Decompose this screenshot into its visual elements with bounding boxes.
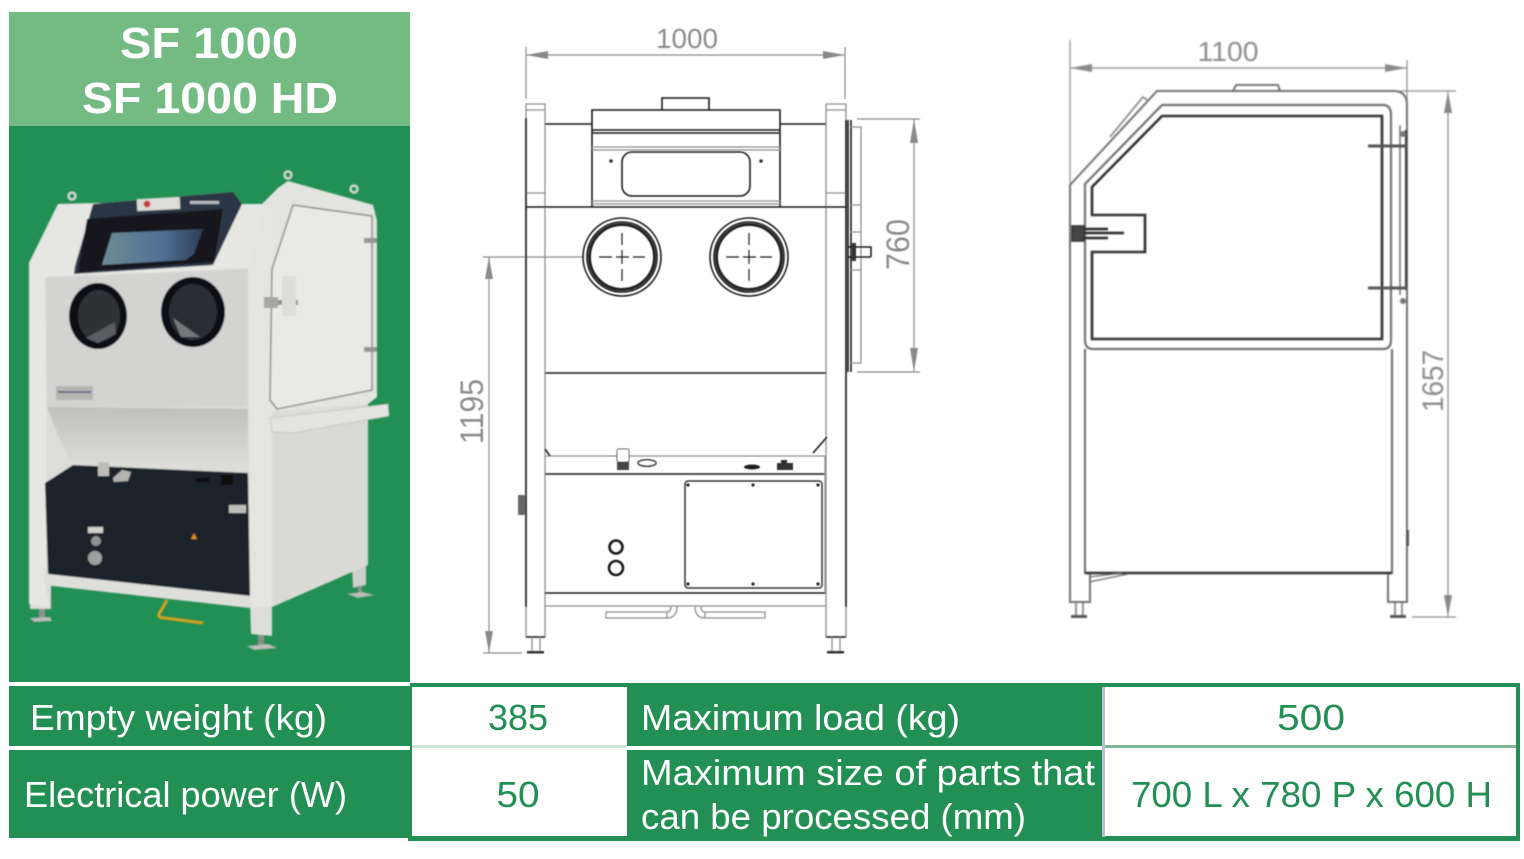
dimension: total height 1657: 1657 bbox=[1417, 350, 1450, 412]
specification table bbox=[9, 683, 1520, 841]
access panel bbox=[685, 481, 822, 588]
dimension: total height 1657 bbox=[1400, 91, 1456, 617]
value: maximum part size: 700 L x 780 P x 600 H bbox=[1131, 774, 1492, 815]
viewing glass bbox=[102, 229, 203, 265]
lifting eyelets bbox=[68, 172, 358, 200]
side panel of cabinet bbox=[272, 405, 368, 607]
yellow foot pedal bbox=[159, 600, 203, 623]
lower panel bbox=[1085, 349, 1392, 573]
hood label bbox=[137, 197, 180, 211]
window hood bbox=[526, 98, 846, 207]
value: empty weight: 385 bbox=[488, 697, 548, 738]
row label: maximum part size: can be processed (mm) bbox=[641, 796, 1026, 837]
row label: maximum part size bbox=[641, 752, 1095, 837]
front right pillar bbox=[248, 204, 280, 607]
dimension: width 1000: 1000 bbox=[656, 23, 718, 54]
left glove port bbox=[69, 283, 127, 349]
feet and pedal bracket bbox=[1071, 530, 1409, 618]
right glove port bbox=[161, 277, 225, 347]
door gasket contour bbox=[1085, 105, 1391, 349]
front face panel bbox=[45, 269, 248, 407]
table frame bbox=[408, 683, 1520, 841]
open blasting recess bbox=[47, 407, 248, 470]
dimension: door 760 bbox=[857, 119, 920, 372]
certification sticker bbox=[56, 386, 93, 400]
dimension: width 1000 bbox=[526, 23, 845, 99]
dimension: height 1195: 1195 bbox=[454, 379, 490, 444]
illustration: blasting cabinet machine bbox=[29, 172, 389, 650]
row label: maximum part size: Maximum size of parts that bbox=[641, 752, 1095, 793]
title banner: SF 1000 HD bbox=[82, 74, 338, 123]
row label: electrical power: Electrical power (W) bbox=[24, 774, 347, 815]
cabinet outer contour bbox=[1070, 85, 1407, 602]
door latch bbox=[1072, 226, 1124, 241]
door latches bbox=[264, 238, 377, 352]
dimension: door 760: 760 bbox=[880, 219, 916, 270]
hinges and door strip bbox=[1368, 125, 1407, 304]
frame pillars bbox=[526, 104, 846, 637]
front left pillar and shoulder bbox=[29, 203, 267, 607]
row label: electrical power bbox=[9, 750, 410, 838]
dimension: height 1195 bbox=[454, 257, 584, 653]
machine silhouette backing bbox=[29, 181, 377, 612]
bottom frame rail bbox=[43, 574, 272, 608]
dimension: depth 1100: 1100 bbox=[1198, 36, 1258, 67]
title banner bbox=[9, 12, 410, 126]
top fittings bbox=[518, 449, 793, 515]
panel: product photo on green background bbox=[9, 12, 410, 682]
value: maximum load: 500 bbox=[1277, 697, 1345, 738]
row label: empty weight bbox=[9, 686, 410, 746]
upper rear housing bbox=[262, 181, 377, 412]
value: electrical power: 50 bbox=[496, 774, 540, 815]
door bbox=[270, 205, 372, 409]
dark control box bbox=[45, 465, 250, 596]
door edge and handle bbox=[848, 120, 871, 372]
side shelf bbox=[270, 404, 389, 433]
right glove port bbox=[710, 218, 788, 296]
row label: empty weight: Empty weight (kg) bbox=[30, 697, 327, 738]
lower cabinet lines bbox=[545, 373, 827, 606]
left glove port bbox=[583, 218, 661, 296]
foot pedals bbox=[606, 606, 765, 618]
control box fittings bbox=[88, 462, 246, 565]
drawing: front view with dimensions bbox=[454, 23, 920, 654]
title banner: SF 1000 bbox=[120, 19, 298, 68]
door window contour bbox=[1092, 116, 1382, 339]
dark viewing window hood bbox=[74, 192, 242, 274]
pressure gauges bbox=[609, 540, 623, 575]
drawing: side view with dimensions bbox=[1070, 36, 1456, 618]
dimension: depth 1100 bbox=[1070, 36, 1407, 185]
cabinet legs and feet bbox=[30, 560, 374, 650]
row label: maximum load: Maximum load (kg) bbox=[641, 697, 960, 738]
adjustable feet bbox=[527, 637, 844, 654]
